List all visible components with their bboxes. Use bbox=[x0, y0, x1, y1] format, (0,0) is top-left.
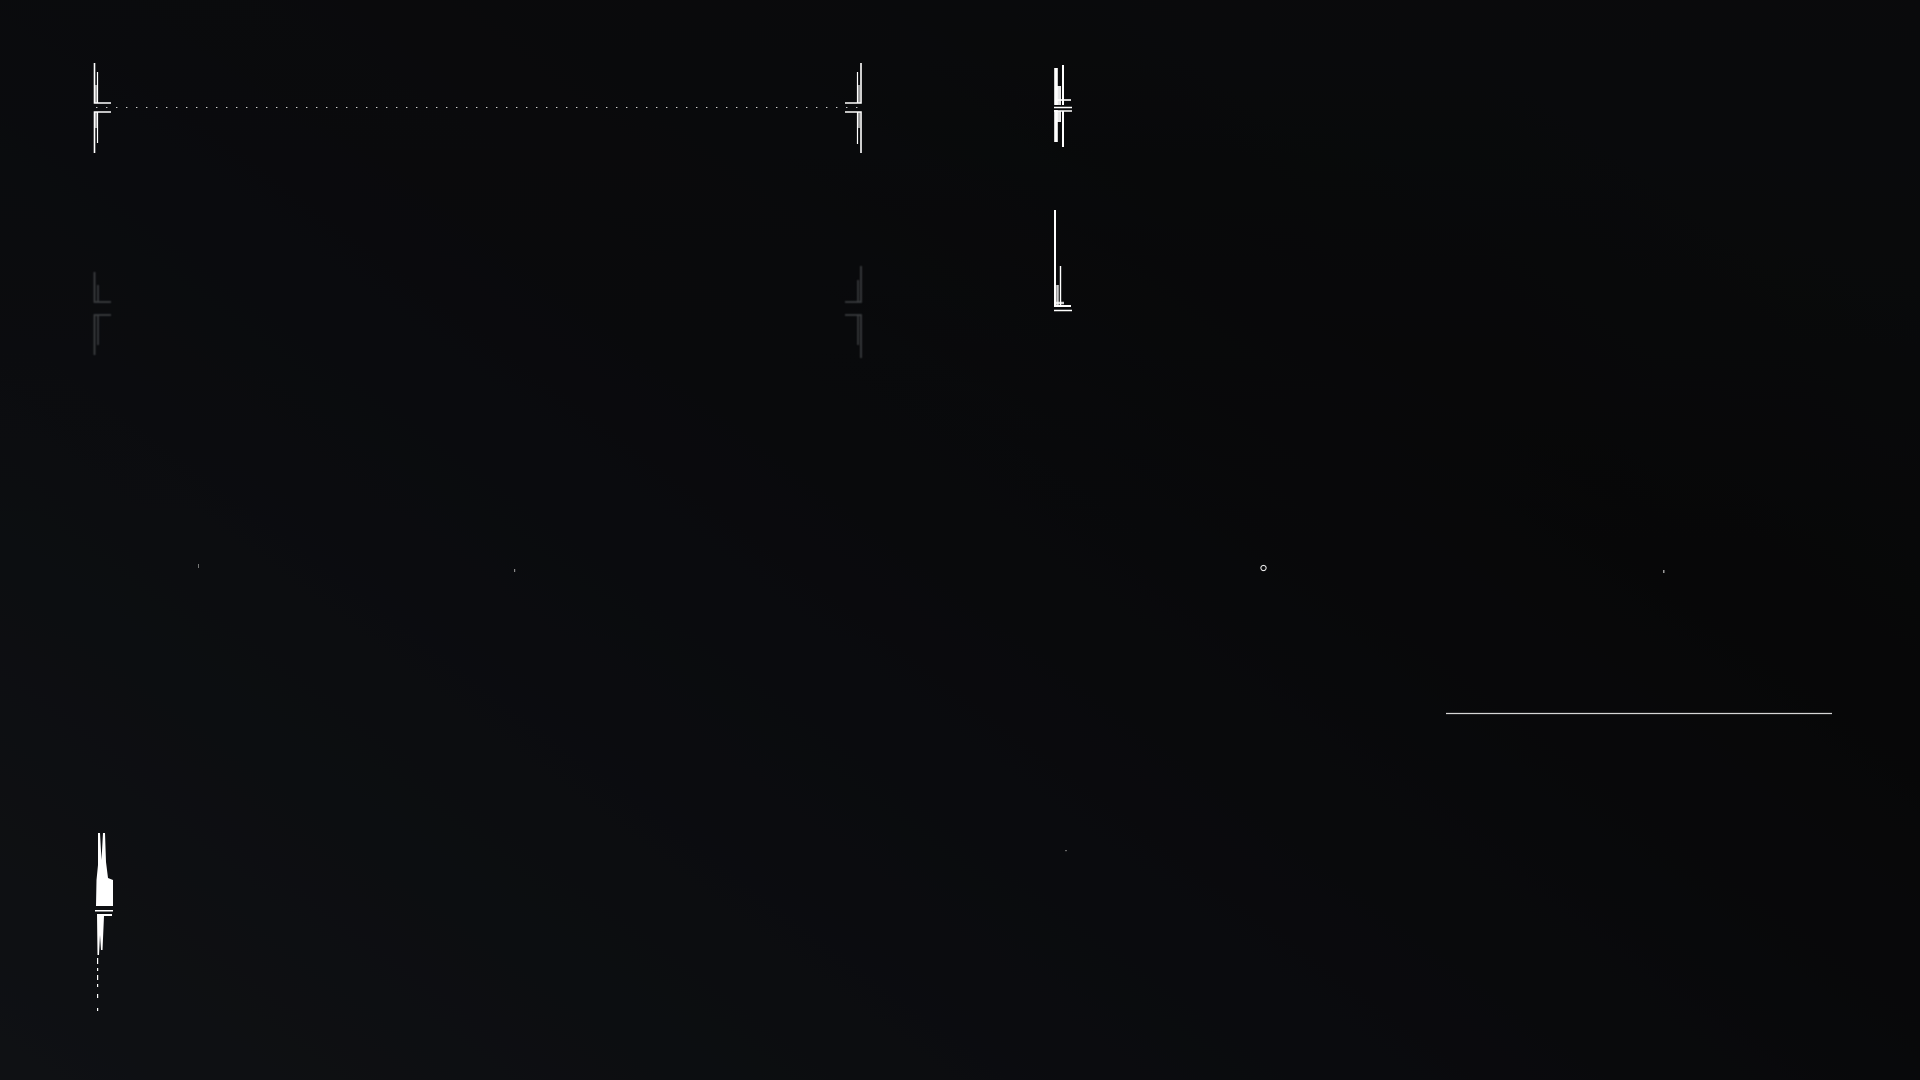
speck: centre left bbox=[514, 569, 515, 572]
faint tick mark: right bbox=[845, 266, 861, 358]
tick mark: third column upper bbox=[1054, 65, 1072, 147]
faint tick mark: left bbox=[94, 272, 111, 355]
tick mark: bottom-left solid bbox=[95, 833, 113, 1011]
tick mark: top-left bbox=[94, 63, 111, 153]
solid rule: right panel bbox=[1446, 712, 1832, 714]
tick mark: third column lower bbox=[1054, 210, 1072, 310]
dotted rule: top-left panel bbox=[96, 106, 862, 108]
tick mark: top-right bbox=[845, 63, 861, 153]
speck: lower centre bbox=[1065, 850, 1067, 851]
ring marker bbox=[1261, 565, 1266, 571]
speck: right bbox=[1663, 570, 1664, 573]
speck: left bbox=[198, 564, 199, 568]
